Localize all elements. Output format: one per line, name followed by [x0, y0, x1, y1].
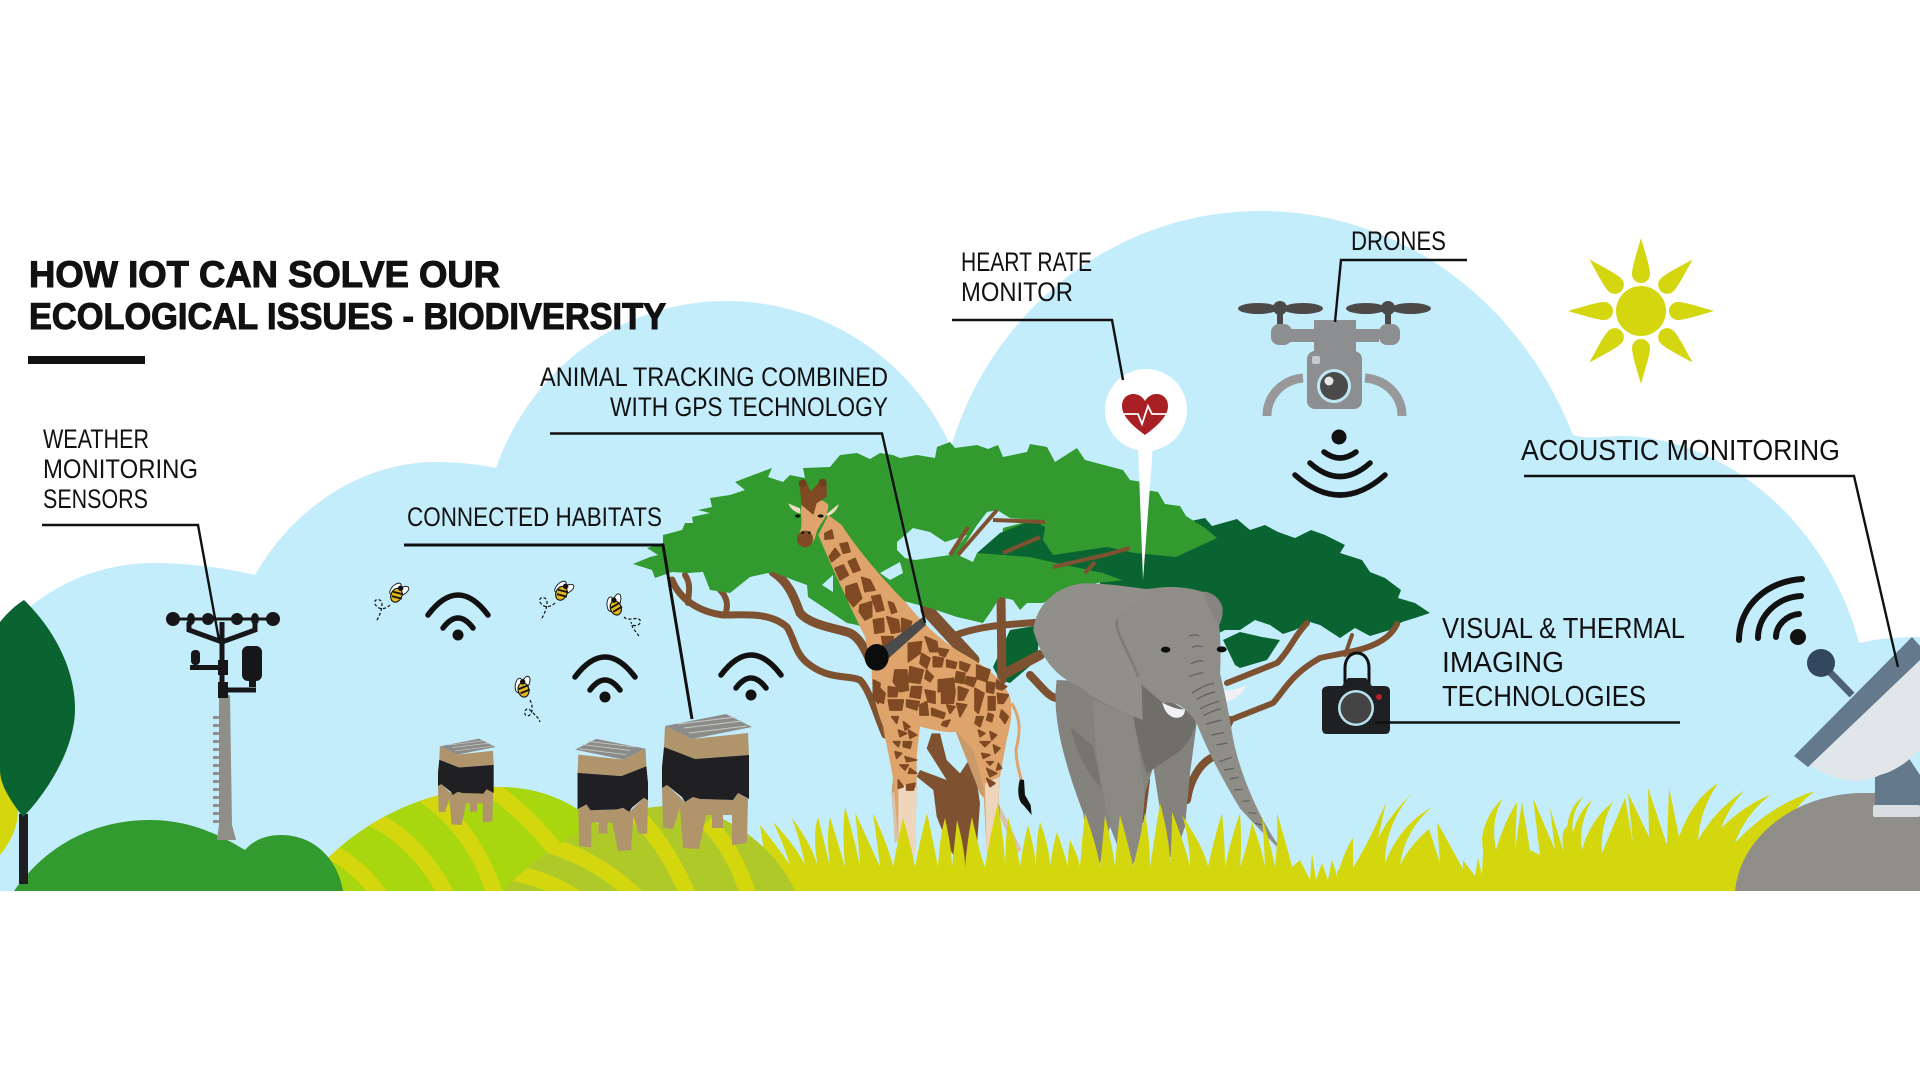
hive large — [662, 714, 752, 849]
left tusk — [1162, 703, 1185, 718]
label: heart rate monitor: MONITOR — [961, 277, 1073, 307]
anemometers — [166, 612, 280, 626]
giraffe with GPS collar — [788, 479, 1032, 873]
drone frame — [1271, 320, 1400, 409]
acacia tree back canopy — [993, 518, 1430, 683]
wifi signals over hives — [428, 595, 781, 702]
hill: front — [503, 806, 795, 891]
GPS collar — [865, 617, 926, 671]
right tusk — [1224, 685, 1246, 702]
label: weather monitoring sensors — [43, 424, 198, 514]
yellow leaf — [0, 762, 18, 855]
wifi from drone — [1295, 430, 1385, 495]
left ear — [1033, 583, 1153, 720]
sky holes — [897, 528, 967, 560]
giraffe spots — [825, 530, 1008, 790]
label: heart rate monitor: HEART RATE — [961, 247, 1092, 277]
left tree — [0, 600, 75, 884]
label: animal tracking: ANIMAL TRACKING COMBINED — [540, 362, 888, 392]
dark inner foliage — [977, 520, 1135, 585]
label: connected habitats: CONNECTED HABITATS — [407, 502, 662, 532]
hive medium — [575, 739, 648, 851]
dish bowl — [1810, 660, 1920, 781]
acoustic monitoring satellite dish — [1794, 637, 1920, 817]
giraffe head — [788, 479, 839, 547]
label: visual and thermal imaging: VISUAL & THERMAL — [1442, 613, 1685, 645]
ear fold — [1117, 619, 1138, 677]
connected beehives — [438, 714, 752, 851]
pulse line — [1124, 406, 1166, 424]
wifi 2 — [575, 657, 635, 702]
eyes — [1161, 646, 1227, 653]
label: weather monitoring sensors: SENSORS — [43, 484, 148, 514]
head and trunk — [1113, 587, 1287, 857]
leader: heart rate — [952, 320, 1123, 380]
label: animal tracking: WITH GPS TECHNOLOGY — [610, 392, 888, 422]
acacia tree front canopy — [633, 442, 1217, 630]
chest — [1133, 683, 1197, 773]
title — [29, 254, 666, 337]
leader: animal tracking — [550, 434, 925, 623]
right ear — [1203, 592, 1223, 625]
hill: back — [328, 787, 598, 891]
mast ticks — [213, 716, 219, 825]
bubble — [1105, 369, 1187, 451]
body — [818, 515, 1011, 867]
elephant body and legs — [1056, 680, 1197, 873]
trunk behind giraffe — [917, 733, 980, 873]
dish base — [1873, 805, 1920, 817]
title underline — [28, 356, 145, 364]
station arms — [189, 622, 256, 695]
propellers — [1238, 301, 1431, 326]
camera lens — [1317, 369, 1351, 403]
leader: drones — [1335, 260, 1467, 322]
acacia tree branches and trunk — [672, 572, 1397, 820]
elephant — [1033, 583, 1287, 873]
hive small — [438, 739, 496, 825]
tree leaf — [0, 600, 75, 817]
label: animal tracking — [540, 362, 888, 422]
dish stand — [1875, 745, 1920, 805]
tree trunk — [19, 814, 28, 884]
skids — [1267, 378, 1402, 416]
label: visual and thermal imaging — [1442, 613, 1685, 713]
trunk wrinkles — [1189, 635, 1262, 825]
bee 2 — [540, 576, 577, 620]
sky cloud background — [0, 211, 1920, 891]
heart rate monitor bubble — [1105, 369, 1187, 580]
striped hills — [328, 787, 795, 891]
camera hanging from tree — [1322, 653, 1390, 734]
dish rim — [1794, 637, 1920, 767]
drone — [1238, 301, 1431, 416]
weather monitoring station — [166, 612, 280, 840]
label: drones: DRONES — [1351, 226, 1446, 256]
label: weather monitoring sensors: WEATHER — [43, 424, 149, 454]
bees — [375, 576, 640, 722]
title: ECOLOGICAL ISSUES - BIODIVERSITY — [29, 296, 666, 337]
pale lower legs — [898, 777, 1000, 867]
tail — [1012, 703, 1022, 782]
wifi 3 — [721, 655, 781, 700]
mast — [217, 695, 236, 840]
wifi 1 — [428, 595, 488, 640]
wifi from satellite dish — [1739, 579, 1806, 645]
body shade — [1071, 727, 1102, 788]
leader: acoustic — [1524, 476, 1898, 667]
bee 4 — [511, 674, 540, 722]
front leg lighter — [1093, 700, 1145, 873]
label: weather monitoring sensors: MONITORING — [43, 454, 198, 484]
leader: habitats — [404, 545, 692, 719]
label: heart rate monitor — [961, 247, 1092, 307]
bee 1 — [375, 578, 412, 622]
arm and receiver — [1821, 663, 1852, 695]
leader: visual — [1375, 721, 1680, 724]
instrument boxes — [191, 646, 262, 698]
far legs — [882, 723, 1022, 853]
canopy shape — [633, 442, 1217, 630]
icon: heart — [1122, 394, 1168, 435]
grass — [760, 783, 1815, 891]
foreground bush — [14, 820, 343, 891]
sun icon — [1568, 238, 1714, 384]
label: visual and thermal imaging: TECHNOLOGIES — [1442, 681, 1646, 713]
bee 3 — [602, 591, 640, 636]
label: acoustic monitoring: ACOUSTIC MONITORING — [1521, 435, 1840, 467]
bubble pointer — [1138, 445, 1153, 580]
label: visual and thermal imaging: IMAGING — [1442, 647, 1564, 679]
title: HOW IOT CAN SOLVE OUR — [29, 254, 500, 295]
rock — [1735, 793, 1920, 891]
leader: weather — [42, 525, 219, 640]
inner branches — [950, 510, 1130, 573]
